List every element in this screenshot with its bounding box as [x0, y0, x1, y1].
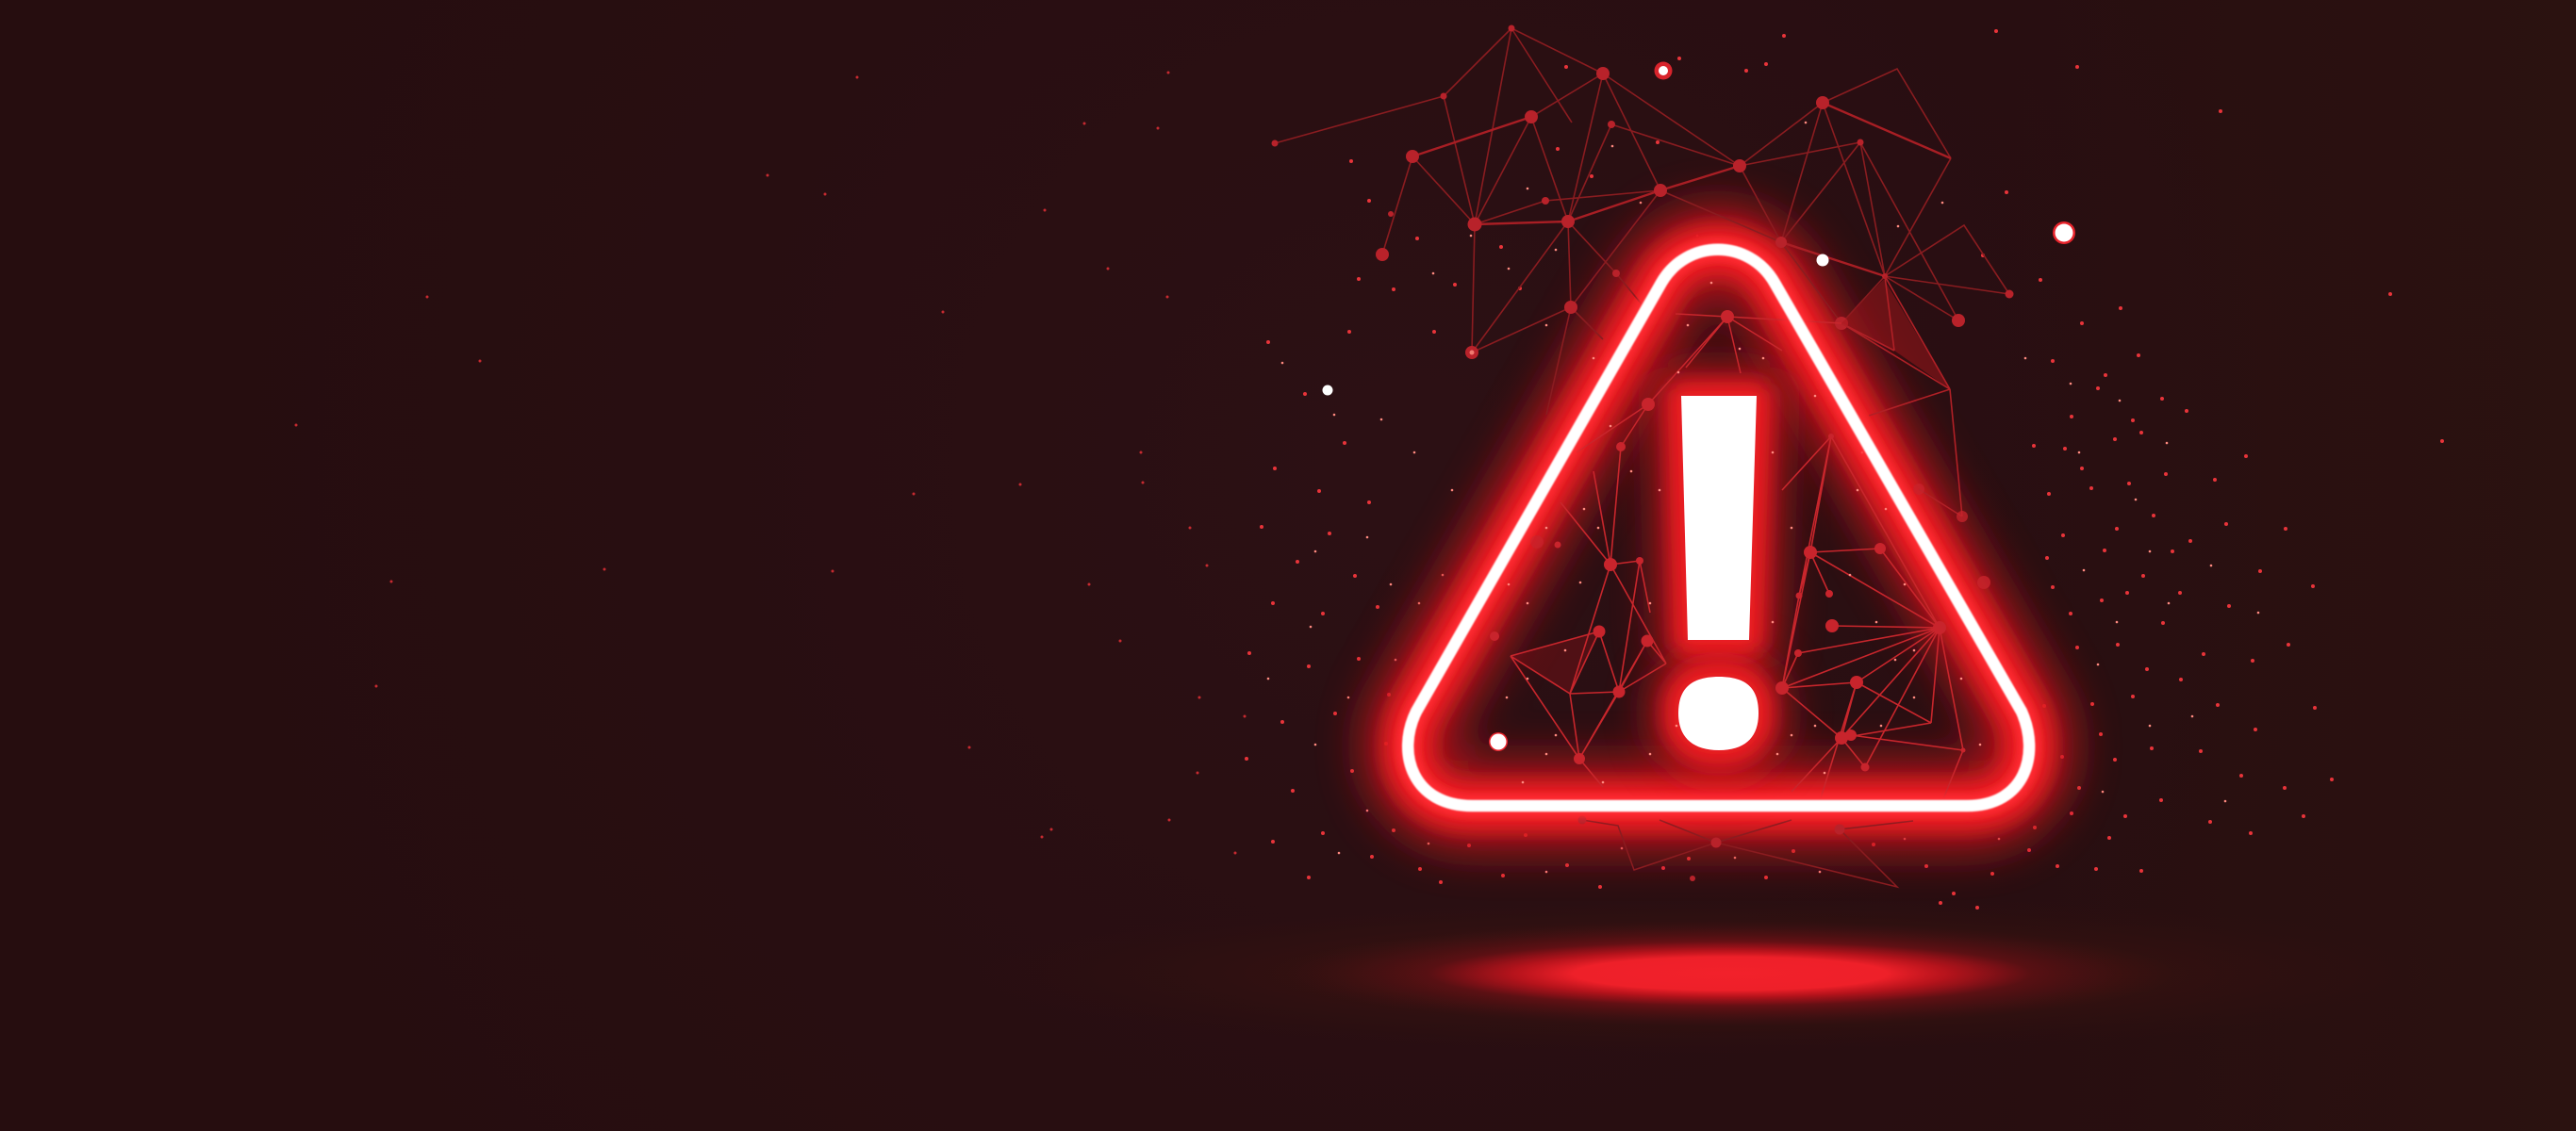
scattered particles: around the triangle [1247, 31, 2442, 908]
scattered particles: far left field [296, 73, 1245, 853]
network: lower right mesh inside triangle [1775, 434, 1990, 801]
network: mesh below triangle [1578, 816, 1913, 887]
triangle outer glow [1408, 250, 2029, 806]
scattered particles: inside the triangle [1507, 283, 1980, 801]
exclamation dot [1678, 677, 1759, 750]
network: upper mesh [1271, 25, 2014, 415]
network: apex mesh inside triangle [1577, 310, 1841, 452]
exclamation bar [1681, 396, 1757, 640]
exclamation mark [1678, 396, 1759, 750]
network: lower left mesh inside triangle [1490, 447, 1666, 787]
white sparkle dots [1322, 62, 2075, 751]
floor reflection glow [976, 893, 2485, 1054]
network: shaded facet on right shoulder [1841, 276, 1962, 516]
triangle neon outline [1408, 250, 2029, 806]
